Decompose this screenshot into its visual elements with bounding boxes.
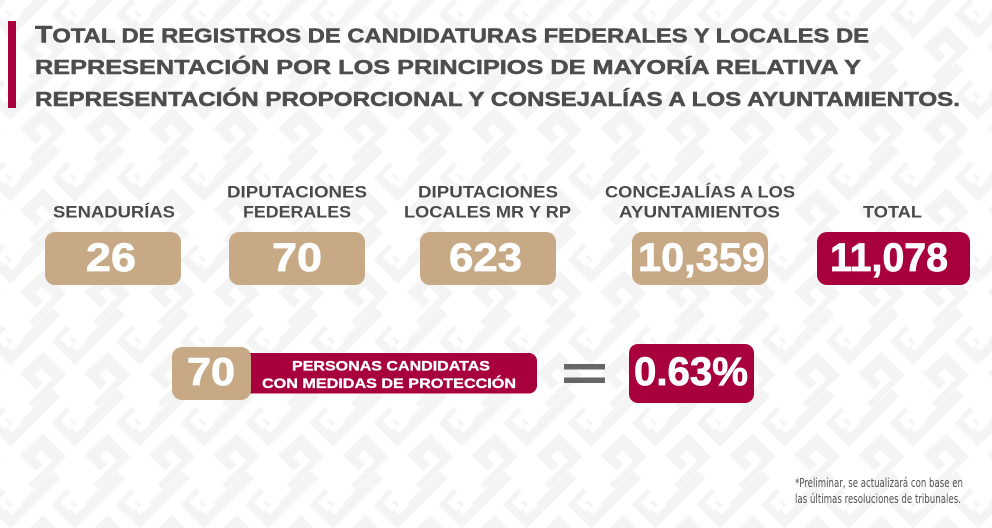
- percentage result: [629, 344, 754, 403]
- column: concejalías: 10,359: [638, 236, 765, 280]
- column: diputaciones federales: DIPUTACIONES: [227, 184, 367, 202]
- callout: persons with protection measures: 70: [187, 351, 235, 394]
- callout: persons with protection measures: PERSONAS CANDIDATAS: [292, 358, 490, 374]
- column: diputaciones federales: 70: [272, 236, 322, 280]
- column: total: TOTAL: [863, 204, 922, 222]
- column: diputaciones federales: FEDERALES: [243, 204, 351, 222]
- column: concejalías: AYUNTAMIENTOS: [619, 204, 780, 222]
- column: diputaciones locales: DIPUTACIONES: [418, 184, 558, 202]
- title: TOTAL DE REGISTROS DE CANDIDATURAS FEDERALES Y LOCALES DE: [35, 22, 869, 48]
- equals sign: [564, 364, 605, 383]
- percentage result: 0.63%: [634, 350, 748, 394]
- title accent bar: [8, 21, 16, 108]
- column: concejalías: [605, 182, 795, 285]
- column: senadurías: [45, 202, 181, 285]
- column: diputaciones federales: [227, 184, 367, 285]
- column: total: [817, 204, 970, 285]
- column: senadurías: 26: [86, 236, 136, 280]
- column: diputaciones locales: LOCALES MR Y RP: [404, 204, 571, 222]
- column: diputaciones locales: 623: [449, 236, 522, 280]
- title: REPRESENTACIÓN POR LOS PRINCIPIOS DE MAYORÍA RELATIVA Y: [35, 55, 862, 79]
- callout: persons with protection measures: CON MEDIDAS DE PROTECCIÓN: [262, 374, 516, 391]
- column: concejalías: CONCEJALÍAS A LOS: [605, 182, 795, 202]
- column: senadurías: SENADURÍAS: [53, 202, 175, 222]
- title: [35, 22, 960, 111]
- column: total: 11,078: [830, 236, 948, 280]
- callout: persons with protection measures: [172, 347, 537, 400]
- footnote: [795, 476, 963, 506]
- title: REPRESENTACIÓN PROPORCIONAL Y CONSEJALÍAS A LOS AYUNTAMIENTOS.: [35, 87, 960, 111]
- column: diputaciones locales: [404, 184, 571, 285]
